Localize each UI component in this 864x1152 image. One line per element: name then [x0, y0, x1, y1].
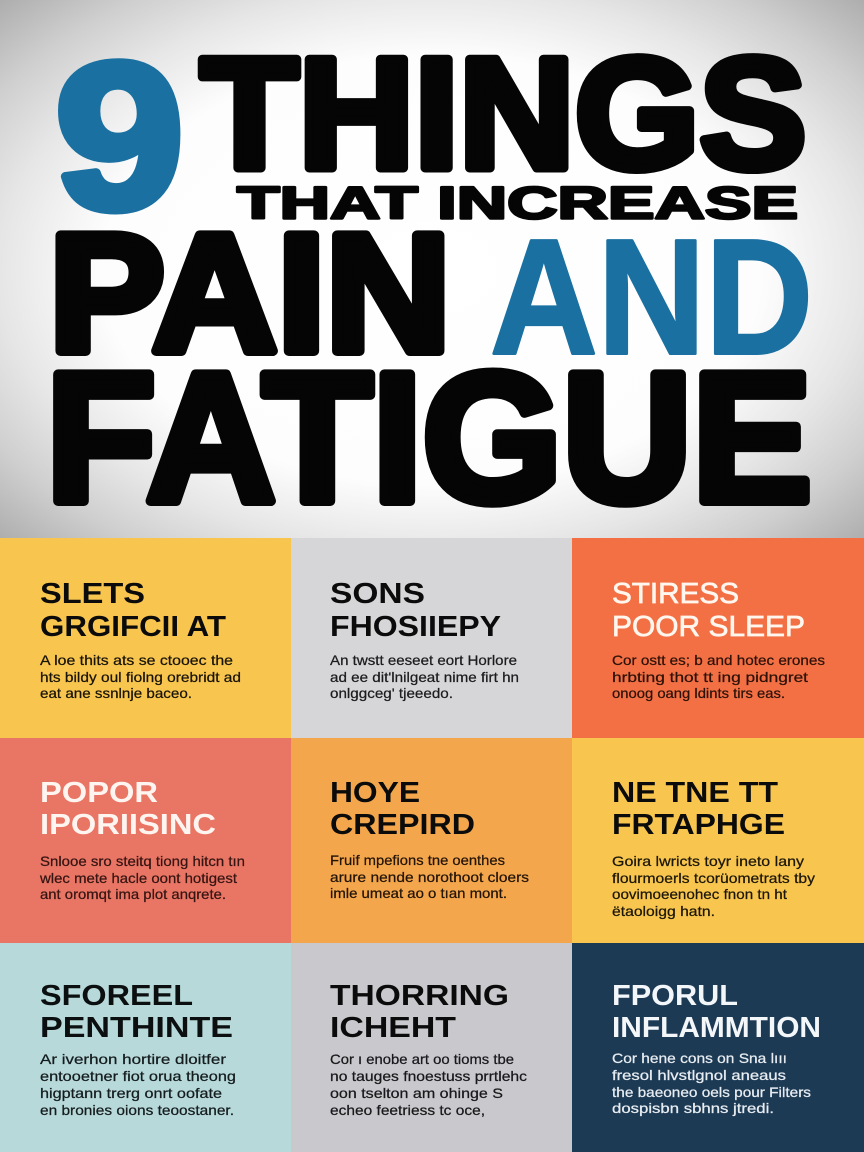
title word: AND: AND	[490, 206, 813, 388]
heading: PENTHINTE	[40, 1012, 233, 1044]
body text	[330, 652, 519, 701]
body text: ant oromqt ima plot anqrete.	[40, 886, 226, 902]
title word: THINGS: THINGS	[200, 26, 806, 202]
panel: hoye crepird	[291, 738, 572, 943]
header panel with title	[0, 0, 864, 540]
heading	[40, 777, 216, 841]
heading: POOR SLEEP	[612, 611, 805, 643]
heading: FRTAPHGE	[612, 809, 785, 841]
body text: no tauges fnoestuss prrtlehc	[330, 1068, 527, 1084]
heading: INFLAMMTION	[612, 1012, 821, 1044]
body text: imle umeat ao o tıan mont.	[330, 885, 507, 901]
body text: en bronies oions teoostaner.	[40, 1102, 234, 1118]
panel: popor iporiisinc	[0, 738, 291, 943]
title word: PAIN: PAIN	[49, 199, 451, 387]
body text: higptann trerg onrt oofate	[40, 1085, 222, 1101]
body text: flourmoerls tcorüometrats tby	[612, 870, 815, 886]
heading: THORRING	[330, 980, 509, 1012]
body text: fresol hlvstlgnol aneaus	[612, 1067, 786, 1083]
body text: the baeoneo oels pour Filters	[612, 1084, 811, 1100]
heading	[330, 777, 475, 841]
body text: hts bildy oul fiolng orebridt ad	[40, 669, 241, 685]
body text: wlec mete hacle oont hotigest	[39, 870, 237, 886]
body text: Ar iverhon hortire dloitfer	[40, 1051, 226, 1067]
body text: Cor hene cons on Sna lııı	[612, 1050, 787, 1066]
heading: SONS	[330, 578, 425, 610]
heading	[40, 980, 233, 1044]
body text: echeo feetriess tc oce,	[330, 1102, 485, 1118]
panel: fporul inflammtion	[572, 943, 864, 1152]
heading: IPORIISINC	[40, 809, 216, 841]
heading: NE TNE TT	[612, 777, 778, 809]
heading	[612, 980, 821, 1044]
body text: Fruif mpefions tne oenthes	[330, 852, 505, 868]
heading: STIRESS	[612, 578, 739, 610]
body text: oovimoeenohec fnon tn ht	[612, 886, 787, 902]
body text	[40, 652, 241, 701]
body text	[612, 1050, 811, 1116]
heading: HOYE	[330, 777, 420, 809]
heading	[330, 980, 509, 1044]
body text: Snlooe sro steitq tiong hitcn tın	[40, 853, 245, 869]
heading	[612, 777, 785, 841]
heading: FHOSIIEPY	[330, 611, 501, 643]
heading: GRGIFCII AT	[40, 611, 226, 643]
body text: eat ane ssnlnje baceo.	[40, 685, 192, 701]
body text: onlggceg' tjeeedo.	[330, 685, 453, 701]
panel: sforeel penthinte	[0, 943, 291, 1152]
title word: FATIGUE: FATIGUE	[46, 334, 812, 540]
heading	[612, 578, 805, 643]
body text	[330, 852, 529, 901]
title line: THAT INCREASE: THAT INCREASE	[237, 178, 798, 228]
body text: onoog oang ldints tirs eas.	[612, 685, 785, 701]
body text: Goira lwricts toyr ineto lany	[612, 853, 804, 869]
body text: ad ee dit'lnilgeat nime firt hn	[330, 669, 519, 685]
body text	[330, 1051, 527, 1118]
heading: SFOREEL	[40, 980, 193, 1012]
body text	[40, 1051, 236, 1118]
heading: POPOR	[40, 777, 158, 809]
body text	[39, 853, 245, 902]
body text: hrbting thot tt ing pidngret	[612, 669, 808, 685]
body text: A loe thits ats se ctooec the	[40, 652, 233, 668]
heading: ICHEHT	[330, 1012, 456, 1044]
body text: dospisbn sbhns jtredi.	[612, 1100, 774, 1116]
body text	[612, 853, 815, 919]
title numeral: 9: 9	[55, 21, 184, 253]
panel: ne tne tt frtaphge	[572, 738, 864, 943]
panel: stress poor sleep	[572, 538, 864, 738]
heading	[40, 578, 226, 643]
panel: sons fhosiiepy	[291, 538, 572, 738]
body text: entooetner fiot orua theong	[40, 1068, 236, 1084]
body text	[612, 652, 825, 701]
panel: thorring icheht	[291, 943, 572, 1152]
body text: oon tselton am ohinge S	[330, 1085, 503, 1101]
heading: SLETS	[40, 578, 145, 610]
header background	[0, 0, 864, 538]
body text: An twstt eeseet eort Horlore	[330, 652, 517, 668]
heading	[330, 578, 501, 643]
heading: FPORUL	[612, 980, 738, 1012]
body text: Cor ı enobe art oo tioms tbe	[330, 1051, 514, 1067]
body text: arure nende norothoot cloers	[330, 869, 529, 885]
body text: Cor ostt es; b and hotec erones	[612, 652, 825, 668]
heading: CREPIRD	[330, 809, 475, 841]
panel: slets grgifciit	[0, 538, 291, 738]
body text: ëtaoloigg hatn.	[612, 903, 715, 919]
